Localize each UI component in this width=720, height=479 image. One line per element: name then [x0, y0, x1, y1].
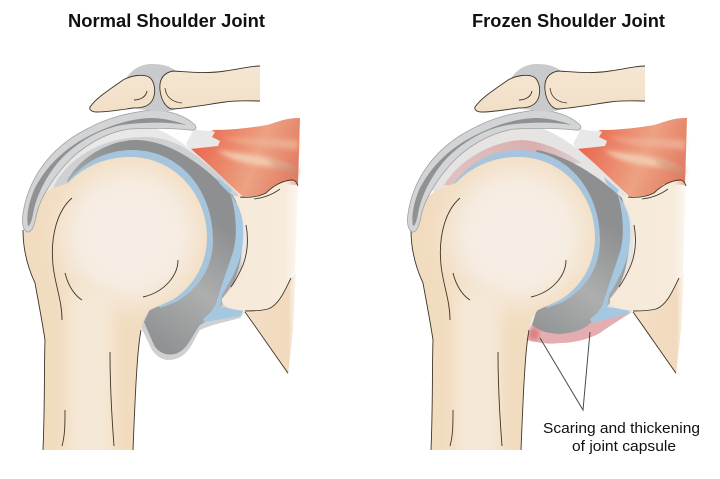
- glenoid cartilage: [203, 177, 243, 322]
- clavicle and acromion: [475, 64, 645, 112]
- callout: scarring and thickening: of joint capsule: [572, 439, 676, 455]
- humeral head cartilage: [67, 150, 213, 308]
- humerus: [403, 150, 603, 460]
- joint capsule with lower pouch: [45, 125, 247, 360]
- subacromial bursa: [22, 110, 196, 232]
- panel: frozen shoulder joint illustration: [403, 64, 687, 460]
- title: frozen shoulder joint: Frozen Shoulder Joint: [472, 10, 665, 31]
- callout: scarring and thickening: Scaring and thickening: [543, 421, 700, 437]
- scapula: [222, 180, 298, 375]
- humeral head cartilage: [454, 150, 600, 308]
- subacromial bursa: [407, 110, 581, 232]
- clavicle and acromion: [90, 64, 260, 112]
- callout leader lines: [540, 332, 590, 410]
- humerus: [15, 150, 215, 460]
- shoulder muscle and tendon: [573, 118, 687, 197]
- callout: scarring and thickening: [543, 421, 700, 455]
- shoulder muscle and tendon: [186, 118, 300, 197]
- title: normal shoulder joint: Normal Shoulder Joint: [68, 10, 265, 31]
- thickened joint capsule: [432, 125, 634, 344]
- scapula: [610, 180, 686, 375]
- panel: normal shoulder joint illustration: [15, 64, 300, 460]
- glenoid cartilage: [590, 177, 630, 323]
